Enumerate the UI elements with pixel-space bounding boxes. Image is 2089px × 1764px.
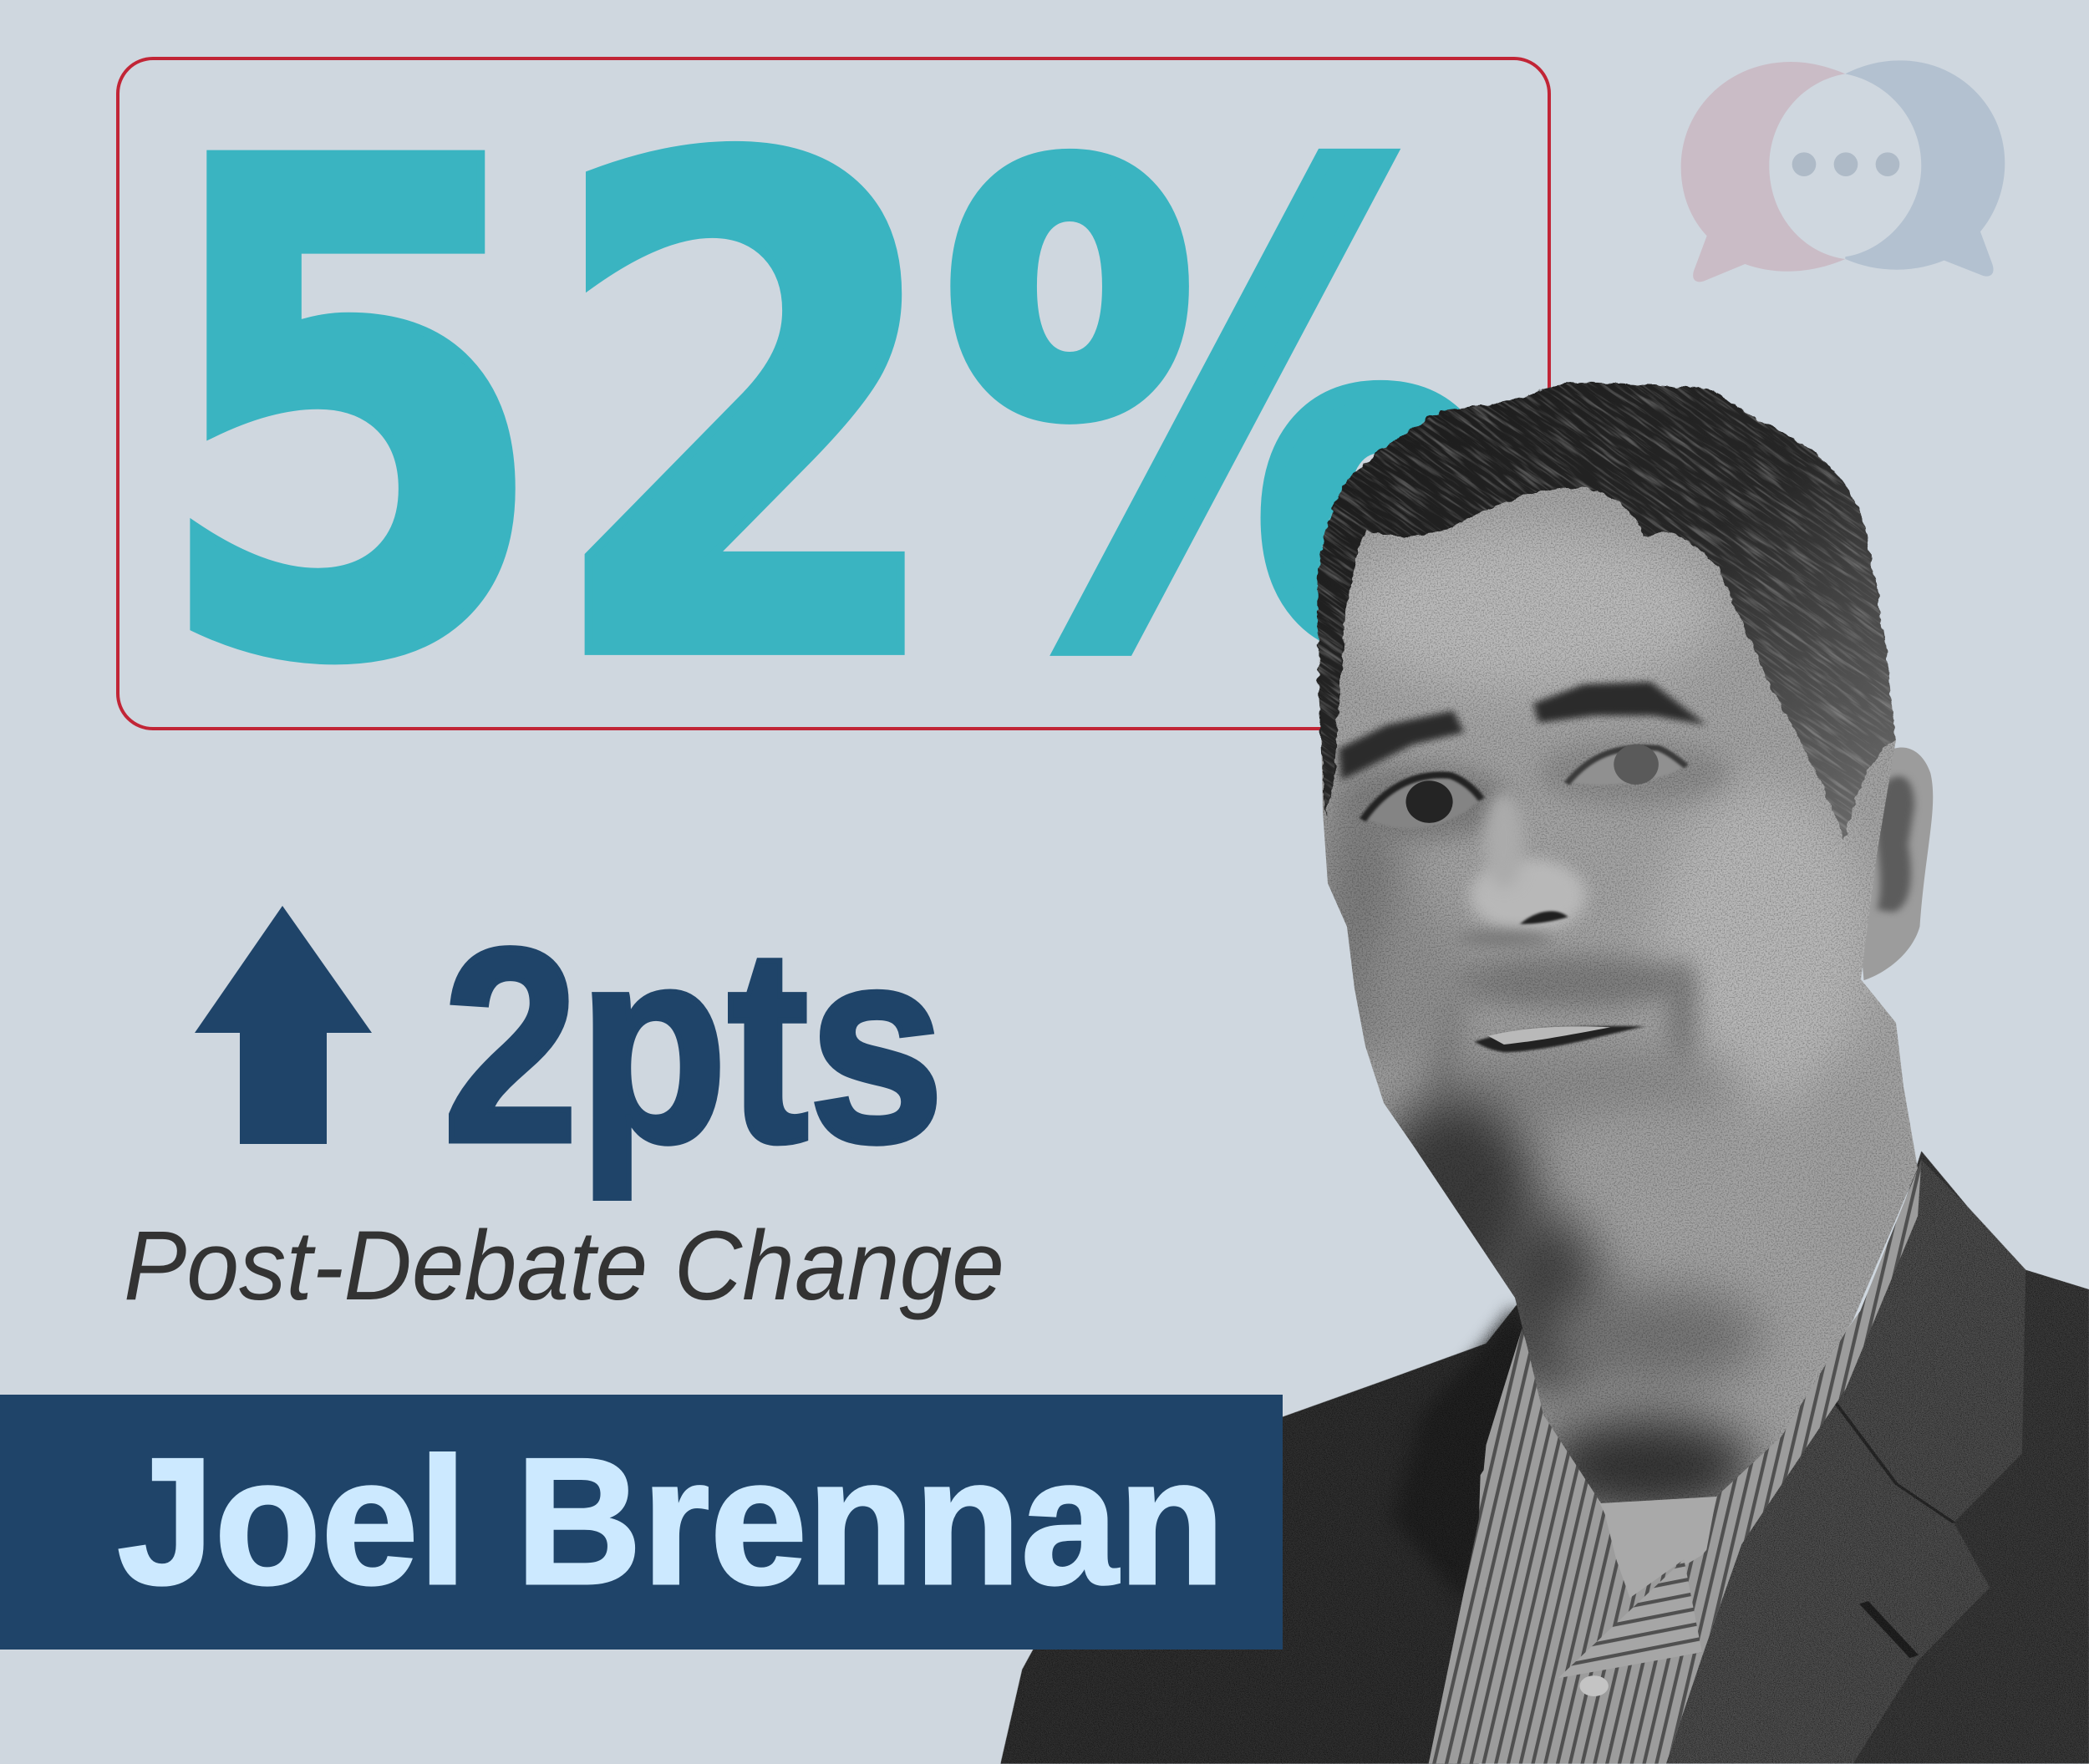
caption: Post-Debate Change: Post-Debate Change — [124, 1211, 1004, 1321]
eyes — [1363, 745, 1686, 828]
mouth — [1475, 1026, 1645, 1052]
big percentage 52% — [150, 20, 1509, 811]
head and neck skin — [1319, 486, 1918, 1503]
big percentage 52%: % — [941, 40, 1509, 790]
portrait photo of Joel Brennan — [1001, 381, 2089, 1764]
red rounded frame — [118, 58, 1549, 729]
shirt — [1429, 1160, 1921, 1764]
ear — [1861, 747, 1933, 980]
name banner — [0, 1395, 1283, 1650]
nose — [1456, 792, 1587, 946]
eyebrows — [1339, 682, 1706, 780]
big percentage 52%: 5 — [150, 20, 551, 811]
hair — [1316, 381, 1896, 840]
facial features — [1339, 682, 1706, 1052]
change value 2pts: 2pts — [443, 891, 944, 1201]
jacket — [1000, 1151, 2089, 1764]
big percentage 52%: 2 — [542, 20, 952, 811]
name: Joel Brennan: Joel Brennan — [117, 1420, 1225, 1622]
icon: chat bubbles — [1681, 60, 2005, 282]
icon: up arrow — [195, 906, 372, 1144]
